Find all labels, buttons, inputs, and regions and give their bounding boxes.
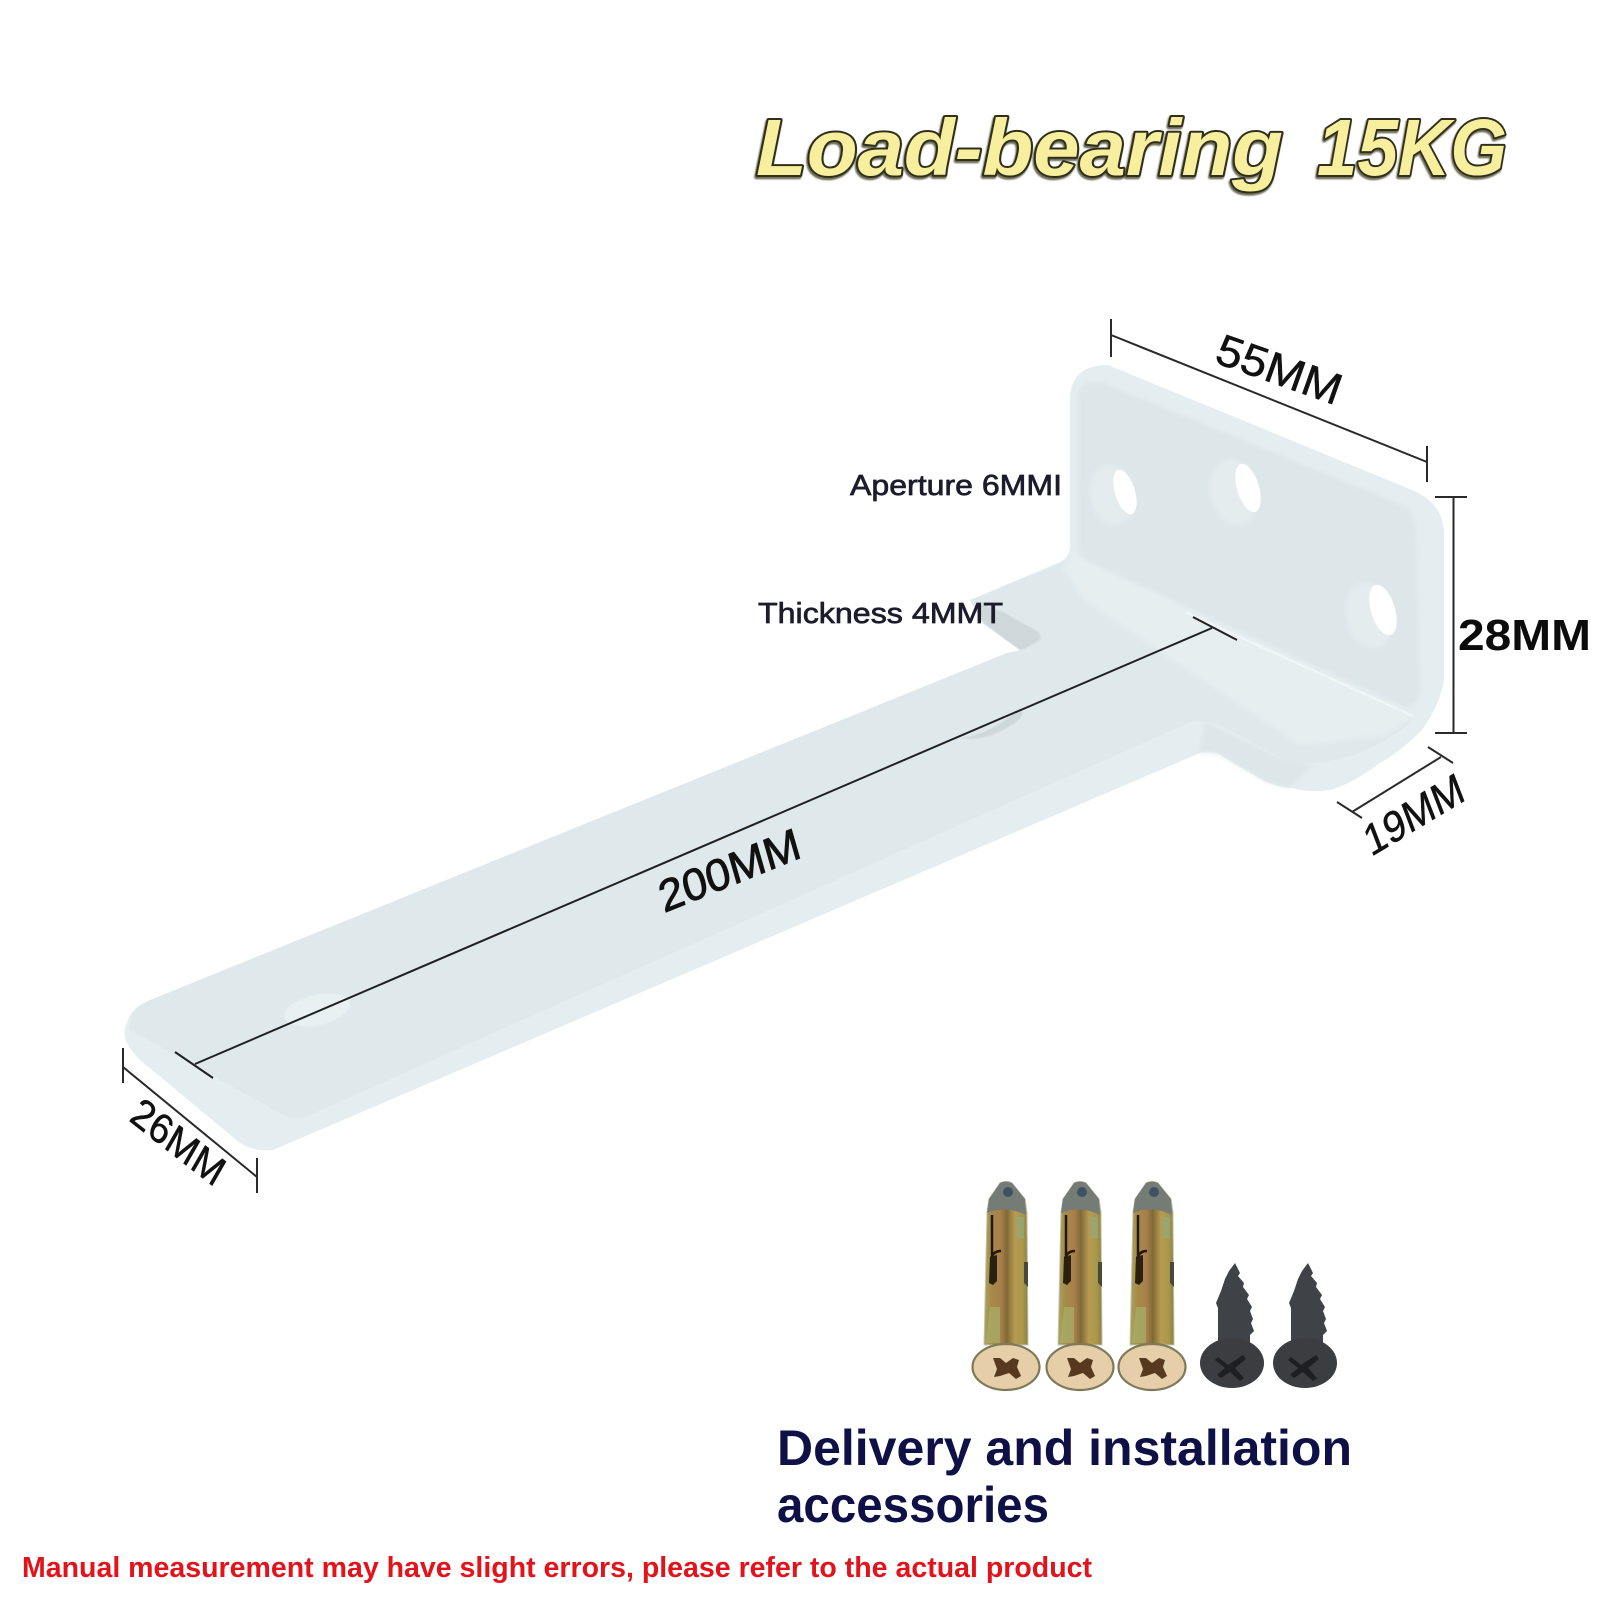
heading: delivery and installation accessories [777,1420,1352,1533]
dimension: 19MM: 19MM [1357,764,1470,865]
dimension: 28MM: 28MM [1458,611,1591,660]
arm top face [130,560,1413,1118]
dimension: 200MM: 200MM [653,819,806,923]
icon: anchor bolt 2 [1046,1182,1114,1390]
bend highlight [1062,556,1413,745]
dimension: 26MM [123,1048,257,1196]
tab side shading [1200,722,1313,788]
installation hardware [972,1182,1337,1390]
title: 15KG [1316,105,1506,194]
title: 15KG [1317,103,1507,192]
title: Load-bearing [756,103,1283,192]
bracket silhouette [124,365,1444,1150]
dimension: 55MM: 55MM [1210,325,1349,415]
bracket [124,365,1444,1150]
footnote: Manual measurement may have slight errors, please refer to the actual product [22,1552,1092,1584]
arm hole end [282,988,352,1032]
label: aperture: Aperture 6MMI [850,470,1062,502]
dimension: 55MM [1111,319,1427,482]
dimension: 28MM [1435,497,1591,733]
heading: delivery and installation accessories: accessories [777,1477,1049,1533]
icon: anchor bolt 1 [972,1182,1040,1390]
slot [975,602,1040,650]
icon: black screw 1 [1200,1263,1264,1388]
plate holes [1084,455,1402,652]
dimension: 26MM: 26MM [123,1089,233,1196]
label: thickness: Thickness 4MMT [758,598,1003,630]
title [755,103,1507,194]
title: Load-bearing [755,105,1282,194]
icon: black screw 2 [1273,1263,1337,1388]
dimension: 200MM [175,617,1237,1078]
icon: anchor bolt 3 [1118,1182,1186,1390]
plate inner face [1078,382,1420,708]
arm hole middle [960,708,1022,739]
heading: delivery and installation accessories: Delivery and installation [777,1420,1352,1476]
